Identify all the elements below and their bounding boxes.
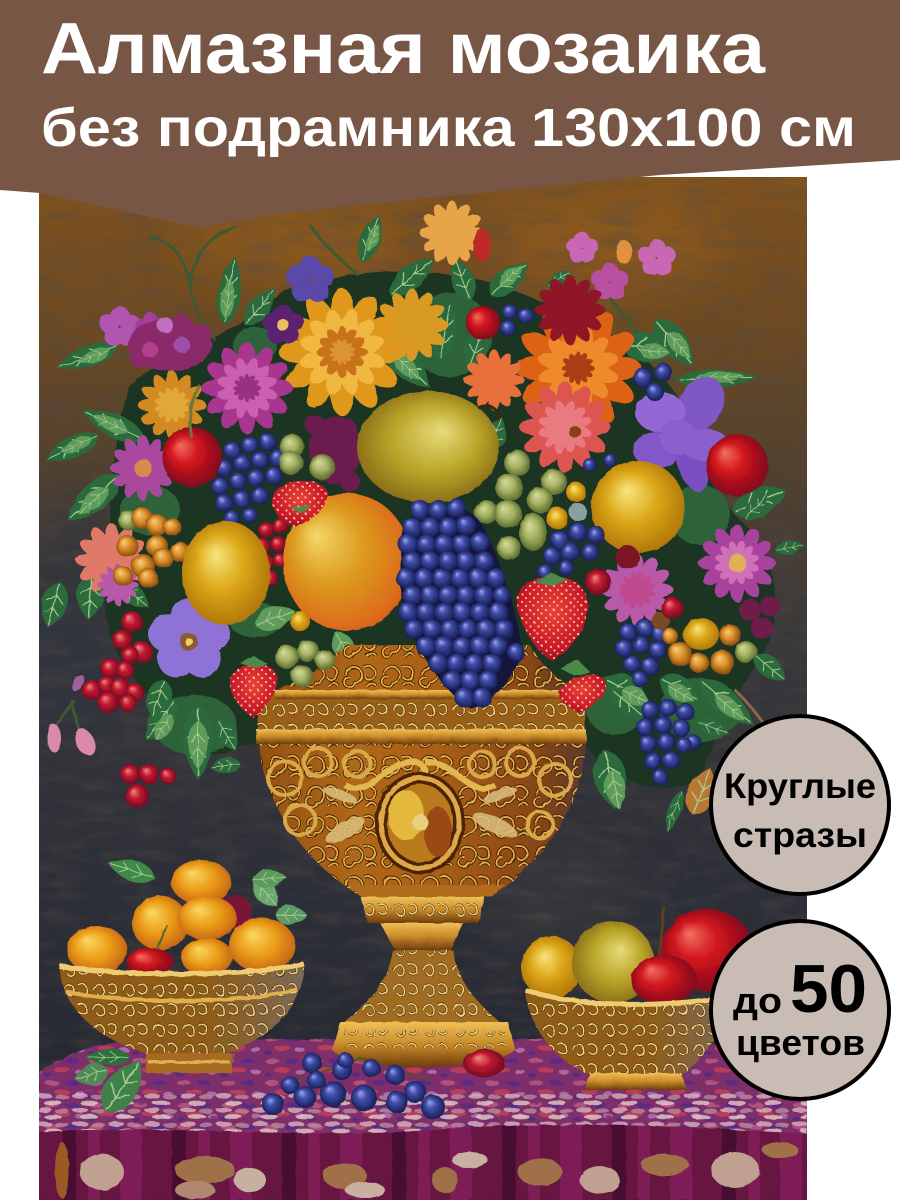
orange chrysanthemum — [463, 304, 642, 473]
bowl left with oranges — [59, 853, 308, 1073]
pink flower with orange berries, left — [75, 507, 190, 606]
green grapes upper — [279, 434, 587, 560]
tablecloth — [39, 1038, 807, 1200]
flowers — [99, 201, 776, 677]
fruit: red cherry left — [162, 385, 222, 487]
subtitle: без подрамника 130х100 см — [41, 98, 856, 158]
sunflower — [278, 288, 449, 416]
grapes on table — [262, 1052, 445, 1119]
title: Алмазная мозаика — [41, 9, 766, 89]
small red fruit on table — [463, 1049, 505, 1077]
tablecloth floral ornaments — [55, 1142, 798, 1199]
fruit: large yellow pear — [357, 391, 499, 503]
vase: foot and base — [332, 897, 515, 1067]
small dark red berries — [258, 518, 288, 586]
brown title banner — [0, 0, 900, 228]
dark foliage behind bouquet — [104, 272, 775, 788]
badge: round rhinestones — [711, 716, 889, 894]
badge: up to 50 colours — [711, 921, 889, 1099]
red berries far left — [82, 611, 176, 808]
badge: round rhinestones: Круглые — [724, 767, 876, 806]
blue grapes lower right — [615, 619, 701, 785]
green grapes lower — [275, 611, 335, 687]
pink buds — [48, 675, 96, 756]
violet flower — [633, 377, 726, 492]
badge: up to 50 colours: 50 — [790, 951, 867, 1027]
fruit: golden lemon right — [591, 461, 685, 553]
fruit: large orange apple — [283, 493, 411, 631]
vase scrollwork — [268, 748, 571, 838]
vase: golden bowl — [256, 645, 586, 902]
badge: up to 50 colours: цветов — [736, 1022, 865, 1063]
leaves on table — [74, 1048, 142, 1112]
painted wall background — [20, 177, 807, 1200]
badge: round rhinestones: стразы — [733, 816, 867, 855]
cluster of blue grapes, left — [211, 433, 287, 526]
fruit: golden orange left — [182, 521, 270, 625]
peach tulip — [420, 201, 632, 265]
orange and green berries right — [652, 612, 757, 674]
leaves — [35, 211, 806, 835]
thin twigs — [47, 225, 677, 745]
painting: still life with fruit — [20, 177, 807, 1200]
bowl right with apples — [521, 907, 753, 1090]
large cluster of blue grapes — [396, 498, 525, 708]
blue grapes right of green — [537, 522, 605, 580]
badge: up to 50 colours: до — [733, 980, 782, 1021]
strawberries — [230, 480, 606, 718]
purple flower left — [148, 598, 230, 677]
medallion — [345, 762, 495, 874]
fruit: red apple right — [706, 434, 768, 496]
